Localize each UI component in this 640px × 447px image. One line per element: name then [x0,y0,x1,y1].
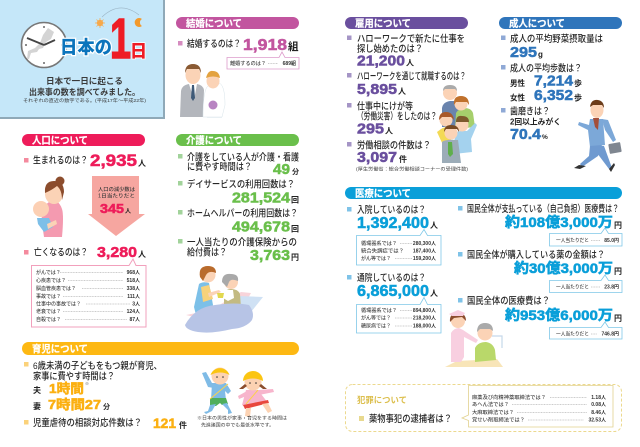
panel: adults [499,17,622,172]
callout: drug law arrests: 8.46人 [591,410,606,416]
stat: out-of-pocket cost: 約108億3,000万 [505,214,613,230]
arrow: population decrease: 人口の減少数は [98,186,135,193]
callout: per person 23.8: 23.8円 [604,284,619,290]
stat: job seekers: ハローワークで新たに仕事を [357,33,465,45]
stat: parents' time: ※ [85,381,89,386]
callout: causes of death: 111人 [127,294,140,300]
stat: parents' time [24,360,162,412]
callout: drug law arrests: 32.53人 [588,418,606,424]
stat: day service uses [178,178,299,206]
stat: marriages: 組 [288,40,299,53]
callout: causes of death: 自殺では？ [36,316,61,323]
stat: daily steps [501,62,582,104]
stat: care benefits: 給付費は？ [187,246,227,258]
stat: job seekers: 人 [406,58,414,68]
stat: tooth brushing: 歯磨きは？ [510,106,550,118]
icon: clock [22,22,66,68]
arrow: population decrease: 345 [100,201,124,216]
callout: divorces [227,52,299,69]
stat: day service uses: デイサービスの利用回数は？ [187,178,295,190]
stat: day service uses: 回 [291,196,299,204]
callout: causes of death: 3人 [132,302,140,308]
icon: caregiver and elderly patient [185,266,263,333]
stat: labor consultations: 3,097 [357,149,397,166]
title: 日本の1日: 日 [130,42,147,61]
arrow: population decrease: 1日当たりだと [98,192,135,200]
stat: workplace injuries [347,100,437,138]
panel: employment [345,17,477,172]
stat: child abuse: 件 [179,420,187,430]
stat: workplace injuries: 295 [357,120,384,138]
callout: per person 85.0 [550,228,622,246]
stat: tooth brushing: 70.4 [510,126,542,143]
callout: drug law arrests: 覚せい剤取締法では？ [472,416,525,424]
callout: per person 23.8: 一人当たりだと [556,284,589,290]
stat: vegetables: 成人の平均野菜摂取量は [510,33,603,45]
stat: labor consultations: 件 [399,154,407,164]
heading: population: 人口について [32,135,88,147]
stat: marriages: 結婚するのは？ [187,38,241,50]
callout: inpatient breakdown: 280,300人 [413,241,436,247]
callout: per person 746.8: 746.8円 [601,332,619,338]
stat: national medical cost: 国民全体の医療費は？ [467,295,550,307]
heading: childcare: 育児について [32,342,88,356]
stat: tooth brushing: % [542,134,548,141]
heading: adults [499,17,622,30]
arrow: population decrease [88,176,145,236]
heading: employment [345,17,468,30]
stat: home helper uses: ホームヘルパーの利用回数は？ [187,208,298,220]
heading: nursing care [176,134,299,147]
callout: per person 746.8: 一人当たりだと [556,330,589,338]
callout: per person 85.0: 一人当たりだと [556,237,589,244]
callout: causes of death [32,259,146,327]
stat: outpatients: 人 [430,289,438,298]
callout: causes of death: 338人 [127,286,140,292]
heading: population [22,134,145,147]
callout: causes of death: 87人 [129,317,140,323]
callout: outpatient breakdown: 糖尿病では？ [361,322,391,330]
callout: causes of death: 124人 [127,309,140,315]
title: 日本の1日: 日本の [60,36,112,58]
stat: workplace injuries: （労働災害）をしたのは？ [357,110,437,122]
callout: causes of death: 518人 [127,278,140,284]
stat: deaths [24,244,146,261]
stat: births: 2,935 [90,151,137,170]
callout: per person 23.8 [550,275,622,292]
stat: deaths: 亡くなるのは？ [34,246,88,258]
stat: national medical cost [458,295,622,323]
stat: parents' time: 1時間 [49,381,84,396]
stat: daily steps: 男性 [510,78,525,88]
intro text: それぞれの直近の数字である。(平成17年～平成22年) [23,97,147,104]
stat: out-of-pocket cost [458,203,622,230]
stat: parents' time: 夫 [33,385,41,395]
stat: births: 人 [138,159,146,168]
callout: drug law arrests: あへん法では？ [472,401,509,408]
callout: outpatient breakdown: 循環器系では？ [361,307,397,314]
callout: drug law arrests: 1.18人 [591,395,606,401]
stat: daily steps: 7,214 [534,72,574,90]
stat: parents' time: 妻 [33,401,41,411]
panel: nursing care [176,134,299,333]
stat: medicine purchases: 約30億3,000万 [514,260,613,276]
callout: causes of death: 968人 [127,270,140,276]
stat: care time: に費やす時間は？ [187,161,252,173]
stat: daily steps: 女性 [510,92,525,102]
stat: care time: 49 [273,161,290,178]
callout: inpatient breakdown: がん等では？ [361,255,391,262]
stat: vegetables: 295 [510,44,537,61]
heading: medical: 医療について [355,187,411,200]
stat: deaths: 人 [138,250,146,259]
stat: job seekers [347,33,465,70]
callout: drug law arrests: 大麻取締法では？ [472,409,514,416]
stat: medicine purchases: 国民全体が購入している薬の金額は？ [467,249,605,261]
stat: job placements [347,70,466,98]
panel: childcare [22,342,299,431]
callout: outpatient breakdown: がん等では？ [361,314,391,322]
stat: deaths: 3,280 [97,244,137,261]
stat: job placements: 5,895 [357,81,397,98]
panel: title [0,0,165,119]
stat: parents' time: 6歳未満の子どもをもつ親が育児、 [33,360,162,372]
stat: hospitalized: 入院しているのは？ [357,205,426,216]
stat: daily steps: 6,352 [534,87,573,104]
stat: job placements: 人 [398,87,406,96]
panel: marriage [176,17,299,118]
stat: day service uses: 281,524 [232,190,291,206]
stat: home helper uses: 494,678 [232,218,290,236]
heading: adults: 成人について [509,17,565,30]
heading: medical [345,187,622,200]
stat: vegetables [501,33,603,61]
stat: job seekers: 21,200 [357,52,405,70]
callout: causes of death: 老衰では？ [36,308,61,315]
stat: marriages: 1,918 [243,37,287,54]
stat: outpatients: 通院しているのは？ [357,273,426,284]
stat: daily steps: 歩 [574,92,582,102]
stat: medicine purchases: 円 [614,267,622,276]
stat: tooth brushing: 2回以上みがく [510,116,561,126]
stat: hospitalized [347,205,438,232]
stat: care benefits: 円 [291,253,299,262]
stat: national medical cost: 約953億6,000万 [505,307,613,323]
stat: daily steps: 歩 [574,78,582,88]
callout: inpatient breakdown: 187,400人 [413,248,436,254]
arrow: population decrease: 人 [125,208,131,215]
callout: outpatient breakdown [356,298,441,333]
intro text [23,76,147,104]
stat: parents' time: 7時間27 [48,397,101,412]
callout: causes of death: 心疾患では？ [36,277,66,284]
callout: drug law arrests: 0.08人 [591,402,606,408]
callout: outpatient breakdown: 188,000人 [413,324,436,330]
icon: walking businessman [574,100,622,172]
stat: parents' time: 分 [103,402,110,411]
callout: divorces: 689組 [283,60,296,67]
callout: per person 85.0: 85.0円 [604,238,619,244]
callout: outpatient breakdown: 218,200人 [413,316,436,322]
icon: mother and baby [33,176,64,237]
stat: job placements: ハローワークを通じて就職するのは？ [357,70,466,82]
stat: parents' time: 家事に費やす時間は？ [33,370,115,382]
panel: population [22,134,146,327]
callout: causes of death: 脳血管疾患では？ [36,285,76,292]
stat: out-of-pocket cost: 円 [614,221,622,230]
note: footnote: ※日本の男性が家事・育児をする時間は [197,414,287,422]
callout: inpatient breakdown: 159,200人 [413,256,436,262]
callout: inpatient breakdown [356,230,441,265]
panel: crime [346,384,622,432]
stat: child abuse: 121 [153,415,176,431]
icon: group of workers [437,85,477,163]
stat: national medical cost: 円 [614,314,622,323]
heading: crime: 犯罪について [357,395,407,405]
stat: hospitalized: 1,392,400 [357,215,429,232]
callout: divorces: 離婚するのは？ [230,60,266,67]
stat: care time [178,152,299,178]
callout: inpatient breakdown: 循環器系では？ [361,240,397,247]
heading: childcare [22,342,299,356]
icon: bride and groom [180,64,225,118]
stat: child abuse [24,415,187,431]
stat: hospitalized: 人 [430,221,438,230]
callout: causes of death: 事故では？ [36,293,61,300]
heading: employment: 雇用について [355,18,411,30]
callout: causes of death: がんでは？ [36,269,61,276]
stat: home helper uses: 回 [291,224,299,234]
stat: drug arrests: 薬物事犯の逮捕者は？ [369,413,452,425]
stat: home helper uses [178,208,299,236]
stat: workplace injuries: 仕事中にけが等 [357,100,413,112]
stat: care benefits: 一人当たりの介護保険からの [187,236,297,248]
stat: births: 生まれるのは？ [33,154,88,166]
callout: drug law arrests: 麻薬及び向精神薬取締法では？ [472,394,546,401]
callout: outpatient breakdown: 894,800人 [413,308,436,314]
stat: care benefits [178,236,299,264]
stat: outpatients [347,273,438,300]
stat: care time: 介護をしている人が介護・看護 [187,152,299,164]
stat: marriages [178,37,299,54]
stat: workplace injuries: 人 [385,126,393,136]
intro text: 出来事の数を調べてみました。 [29,87,140,97]
icon: nurse and patient [445,310,503,367]
callout: drug law arrests [462,386,613,427]
callout: per person 746.8 [550,322,622,339]
title: 日本の1日 [60,7,147,71]
panel: medical [345,187,622,367]
stat: medicine purchases [458,249,622,276]
stat: labor consultations: (厚生労働省：総合労働相談コーナーの受理件数) [356,166,469,172]
heading: nursing care: 介護について [186,134,242,147]
icon: two children [202,368,274,417]
callout: inpatient breakdown: 統合失調症では？ [361,248,404,254]
stat: labor consultations: 労働相談の件数は？ [357,140,431,152]
note: footnote [197,414,287,428]
stat: labor consultations [347,140,469,172]
note: footnote: 先進諸国の中でも最低水準です。 [201,422,274,428]
stat: child abuse: 児童虐待の相談対応件数は？ [33,417,142,429]
stat: care benefits: 3,763 [250,247,290,264]
intro text: 日本で一日に起こる [46,76,123,86]
stat: tooth brushing [501,106,561,143]
stat: outpatients: 6,865,000 [357,283,429,300]
stat: care time: 分 [292,167,299,176]
stat: daily steps: 成人の平均歩数は？ [510,62,582,74]
heading: marriage: 結婚について [186,17,242,30]
stat: births [24,151,146,170]
callout: causes of death: 仕事中の事故では？ [36,300,81,308]
title: 日本の1日: 1 [110,7,131,71]
stat: job seekers: 探し始めたのは？ [357,43,423,55]
stat: vegetables: g [538,50,543,59]
icon: sun and moon arc [95,8,142,28]
